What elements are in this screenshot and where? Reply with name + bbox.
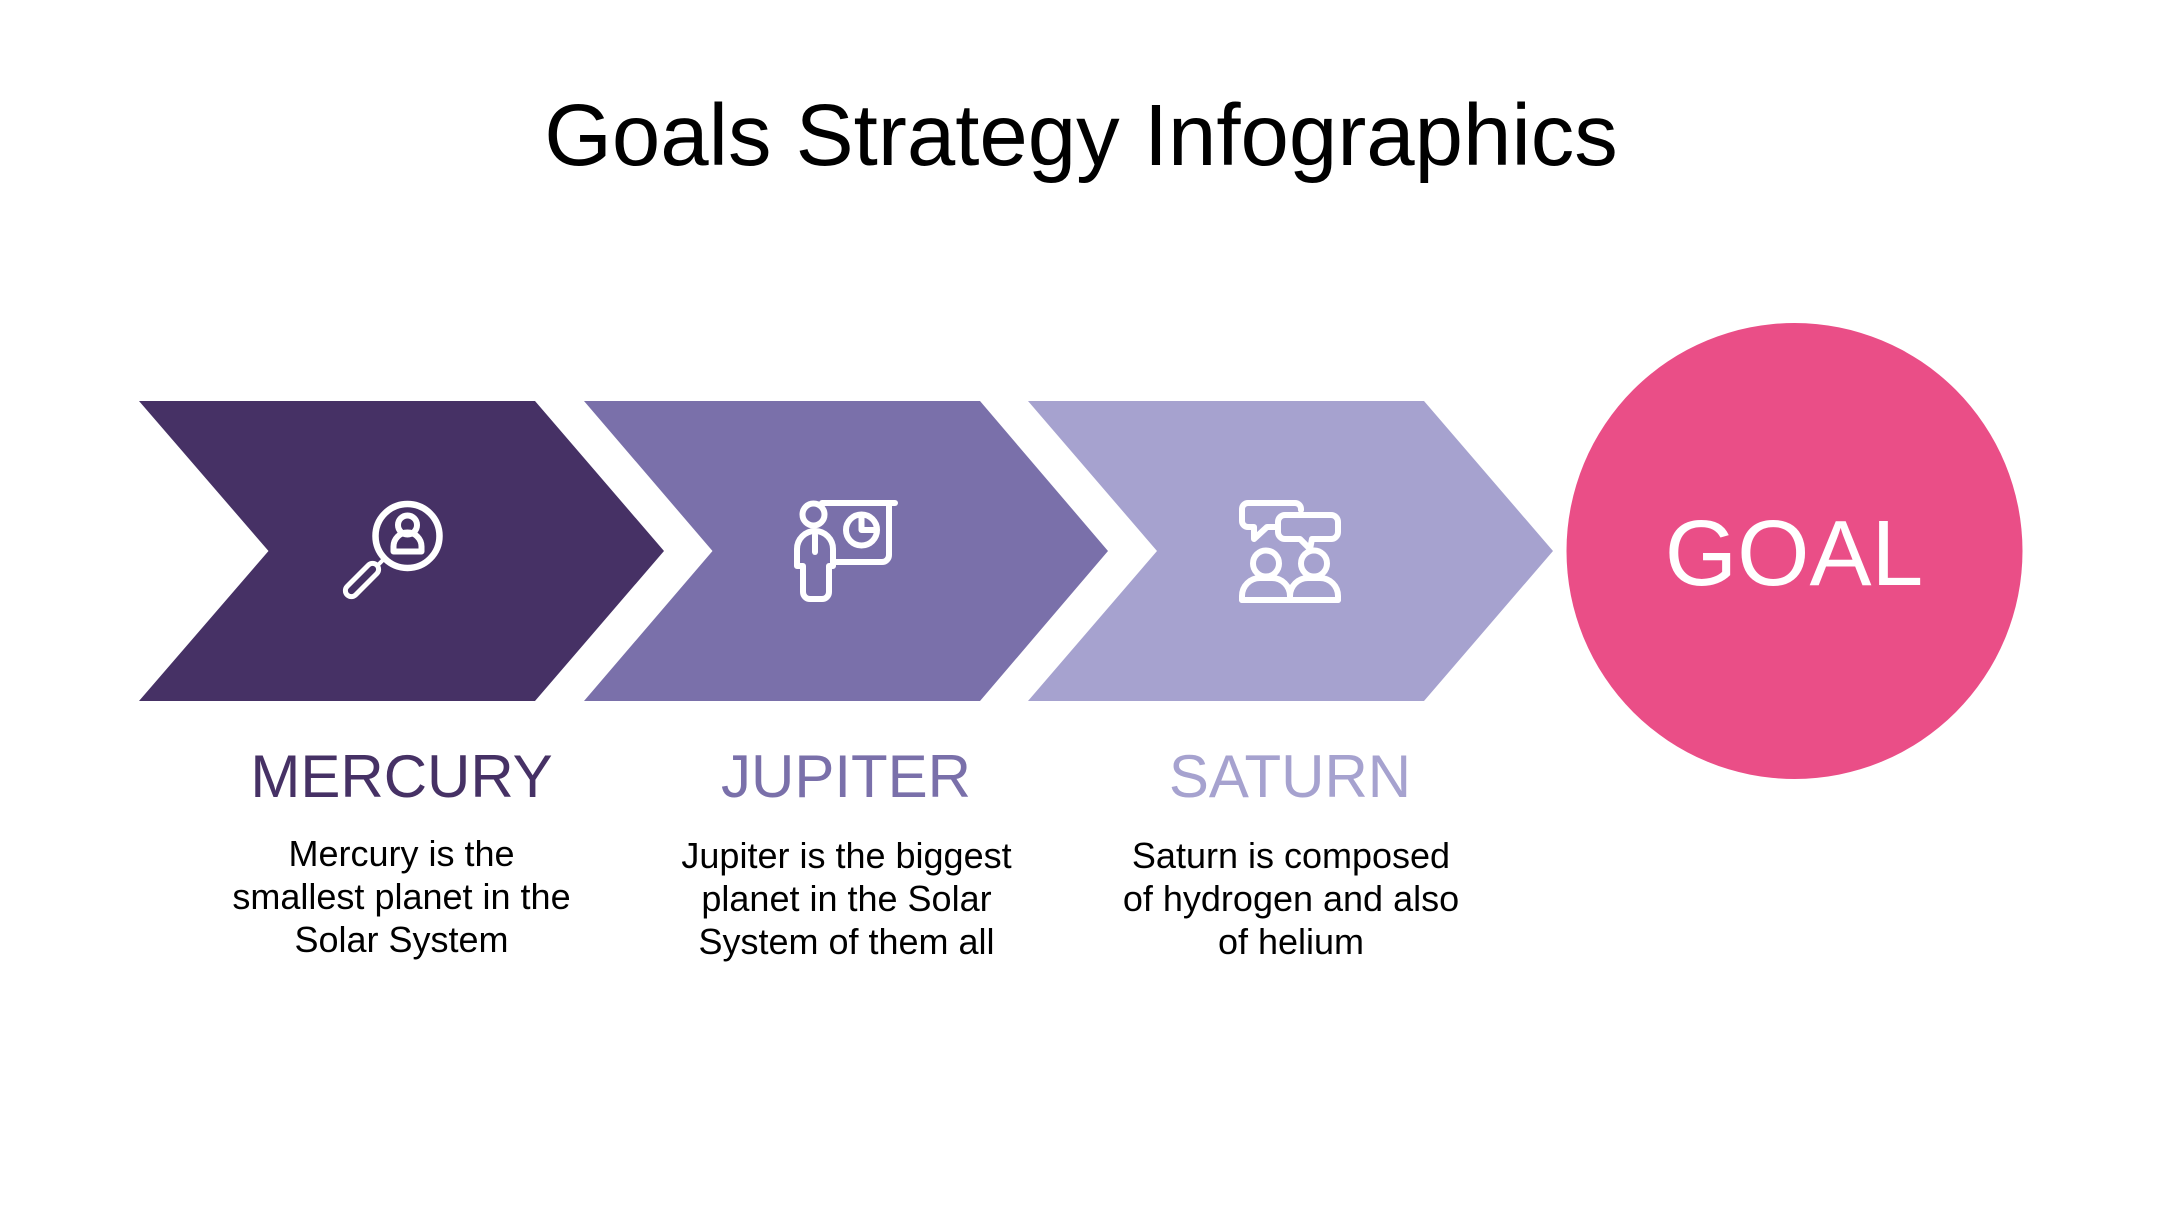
heading: Saturn: SATURN: [1169, 743, 1411, 810]
chevron: Mercury: [139, 401, 664, 701]
text: Saturn description: of helium: [1218, 921, 1364, 962]
text: Saturn description: Saturn is composed: [1132, 835, 1450, 876]
text: Jupiter description: Jupiter is the biggest: [681, 835, 1012, 876]
icon: two people talking: [1242, 503, 1338, 600]
icon: presenter with chart board: [797, 503, 895, 599]
goal circle: [1566, 323, 2022, 779]
text: Mercury description: Mercury is the: [288, 833, 515, 874]
text: Mercury description: Solar System: [294, 919, 509, 960]
icon: magnifier with person: [343, 504, 440, 599]
chevron: Saturn: [1028, 401, 1553, 701]
text: Mercury description: smallest planet in the: [232, 876, 571, 917]
heading: Jupiter: JUPITER: [721, 743, 971, 810]
title: Goals Strategy Infographics: [544, 87, 1618, 184]
heading: Mercury: MERCURY: [250, 743, 553, 810]
chevron: Jupiter: [584, 401, 1108, 701]
goal label: GOAL: [1665, 501, 1923, 605]
text: Jupiter description: planet in the Solar: [701, 878, 992, 919]
text: Jupiter description: System of them all: [698, 921, 995, 962]
text: Saturn description: of hydrogen and also: [1123, 878, 1459, 919]
